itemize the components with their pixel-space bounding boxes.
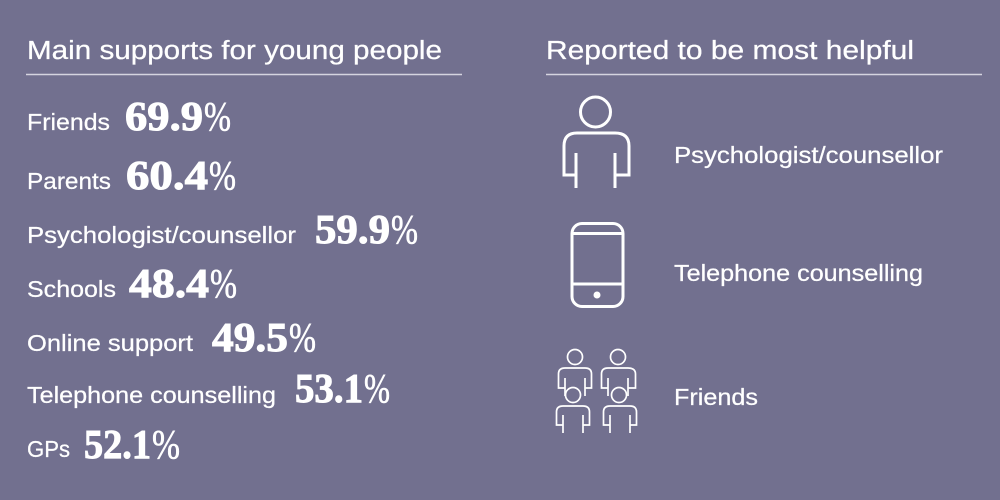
row: schools (27, 260, 237, 306)
icon: person (564, 97, 629, 188)
row: GPs (27, 421, 180, 467)
row: psychologist/counsellor: 59.9 (315, 206, 390, 252)
row: psychologist/counsellor (27, 206, 418, 252)
row: telephone counselling: Telephone counselling (27, 382, 276, 408)
row: parents: % (209, 152, 236, 198)
row: online support (27, 314, 316, 360)
row: parents: 60.4 (126, 152, 208, 198)
row: online support: 49.5 (212, 314, 288, 360)
label: telephone counselling: Telephone counselling (674, 260, 923, 286)
label: psychologist/counsellor: Psychologist/counsellor (674, 142, 943, 168)
row: friends (27, 93, 231, 139)
row: online support: Online support (27, 330, 194, 356)
label: friends: Friends (674, 384, 758, 410)
icon: group of people (556, 350, 636, 433)
row: friends: % (204, 93, 231, 139)
panel: most helpful (546, 37, 982, 433)
row: psychologist/counsellor: Psychologist/counsellor (27, 222, 296, 248)
row: GPs: GPs (27, 436, 70, 462)
row: schools: 48.4 (129, 260, 209, 306)
row: telephone counselling (27, 365, 390, 411)
icon: telephone (572, 224, 623, 306)
row: friends: 69.9 (125, 93, 203, 139)
row: friends: Friends (27, 109, 110, 135)
row: parents (27, 152, 236, 198)
panel: main supports (26, 37, 462, 467)
row: telephone counselling: % (364, 365, 390, 411)
row: online support: % (289, 314, 316, 360)
row: telephone counselling: 53.1 (295, 365, 363, 411)
row: schools: Schools (27, 276, 116, 302)
row: GPs: 52.1 (84, 421, 151, 467)
row: schools: % (210, 260, 237, 306)
row: psychologist/counsellor: % (391, 206, 418, 252)
heading: most helpful: Reported to be most helpful (546, 37, 914, 65)
row: GPs: % (152, 421, 180, 467)
heading: main supports: Main supports for young people (27, 37, 442, 65)
row: parents: Parents (27, 168, 111, 194)
